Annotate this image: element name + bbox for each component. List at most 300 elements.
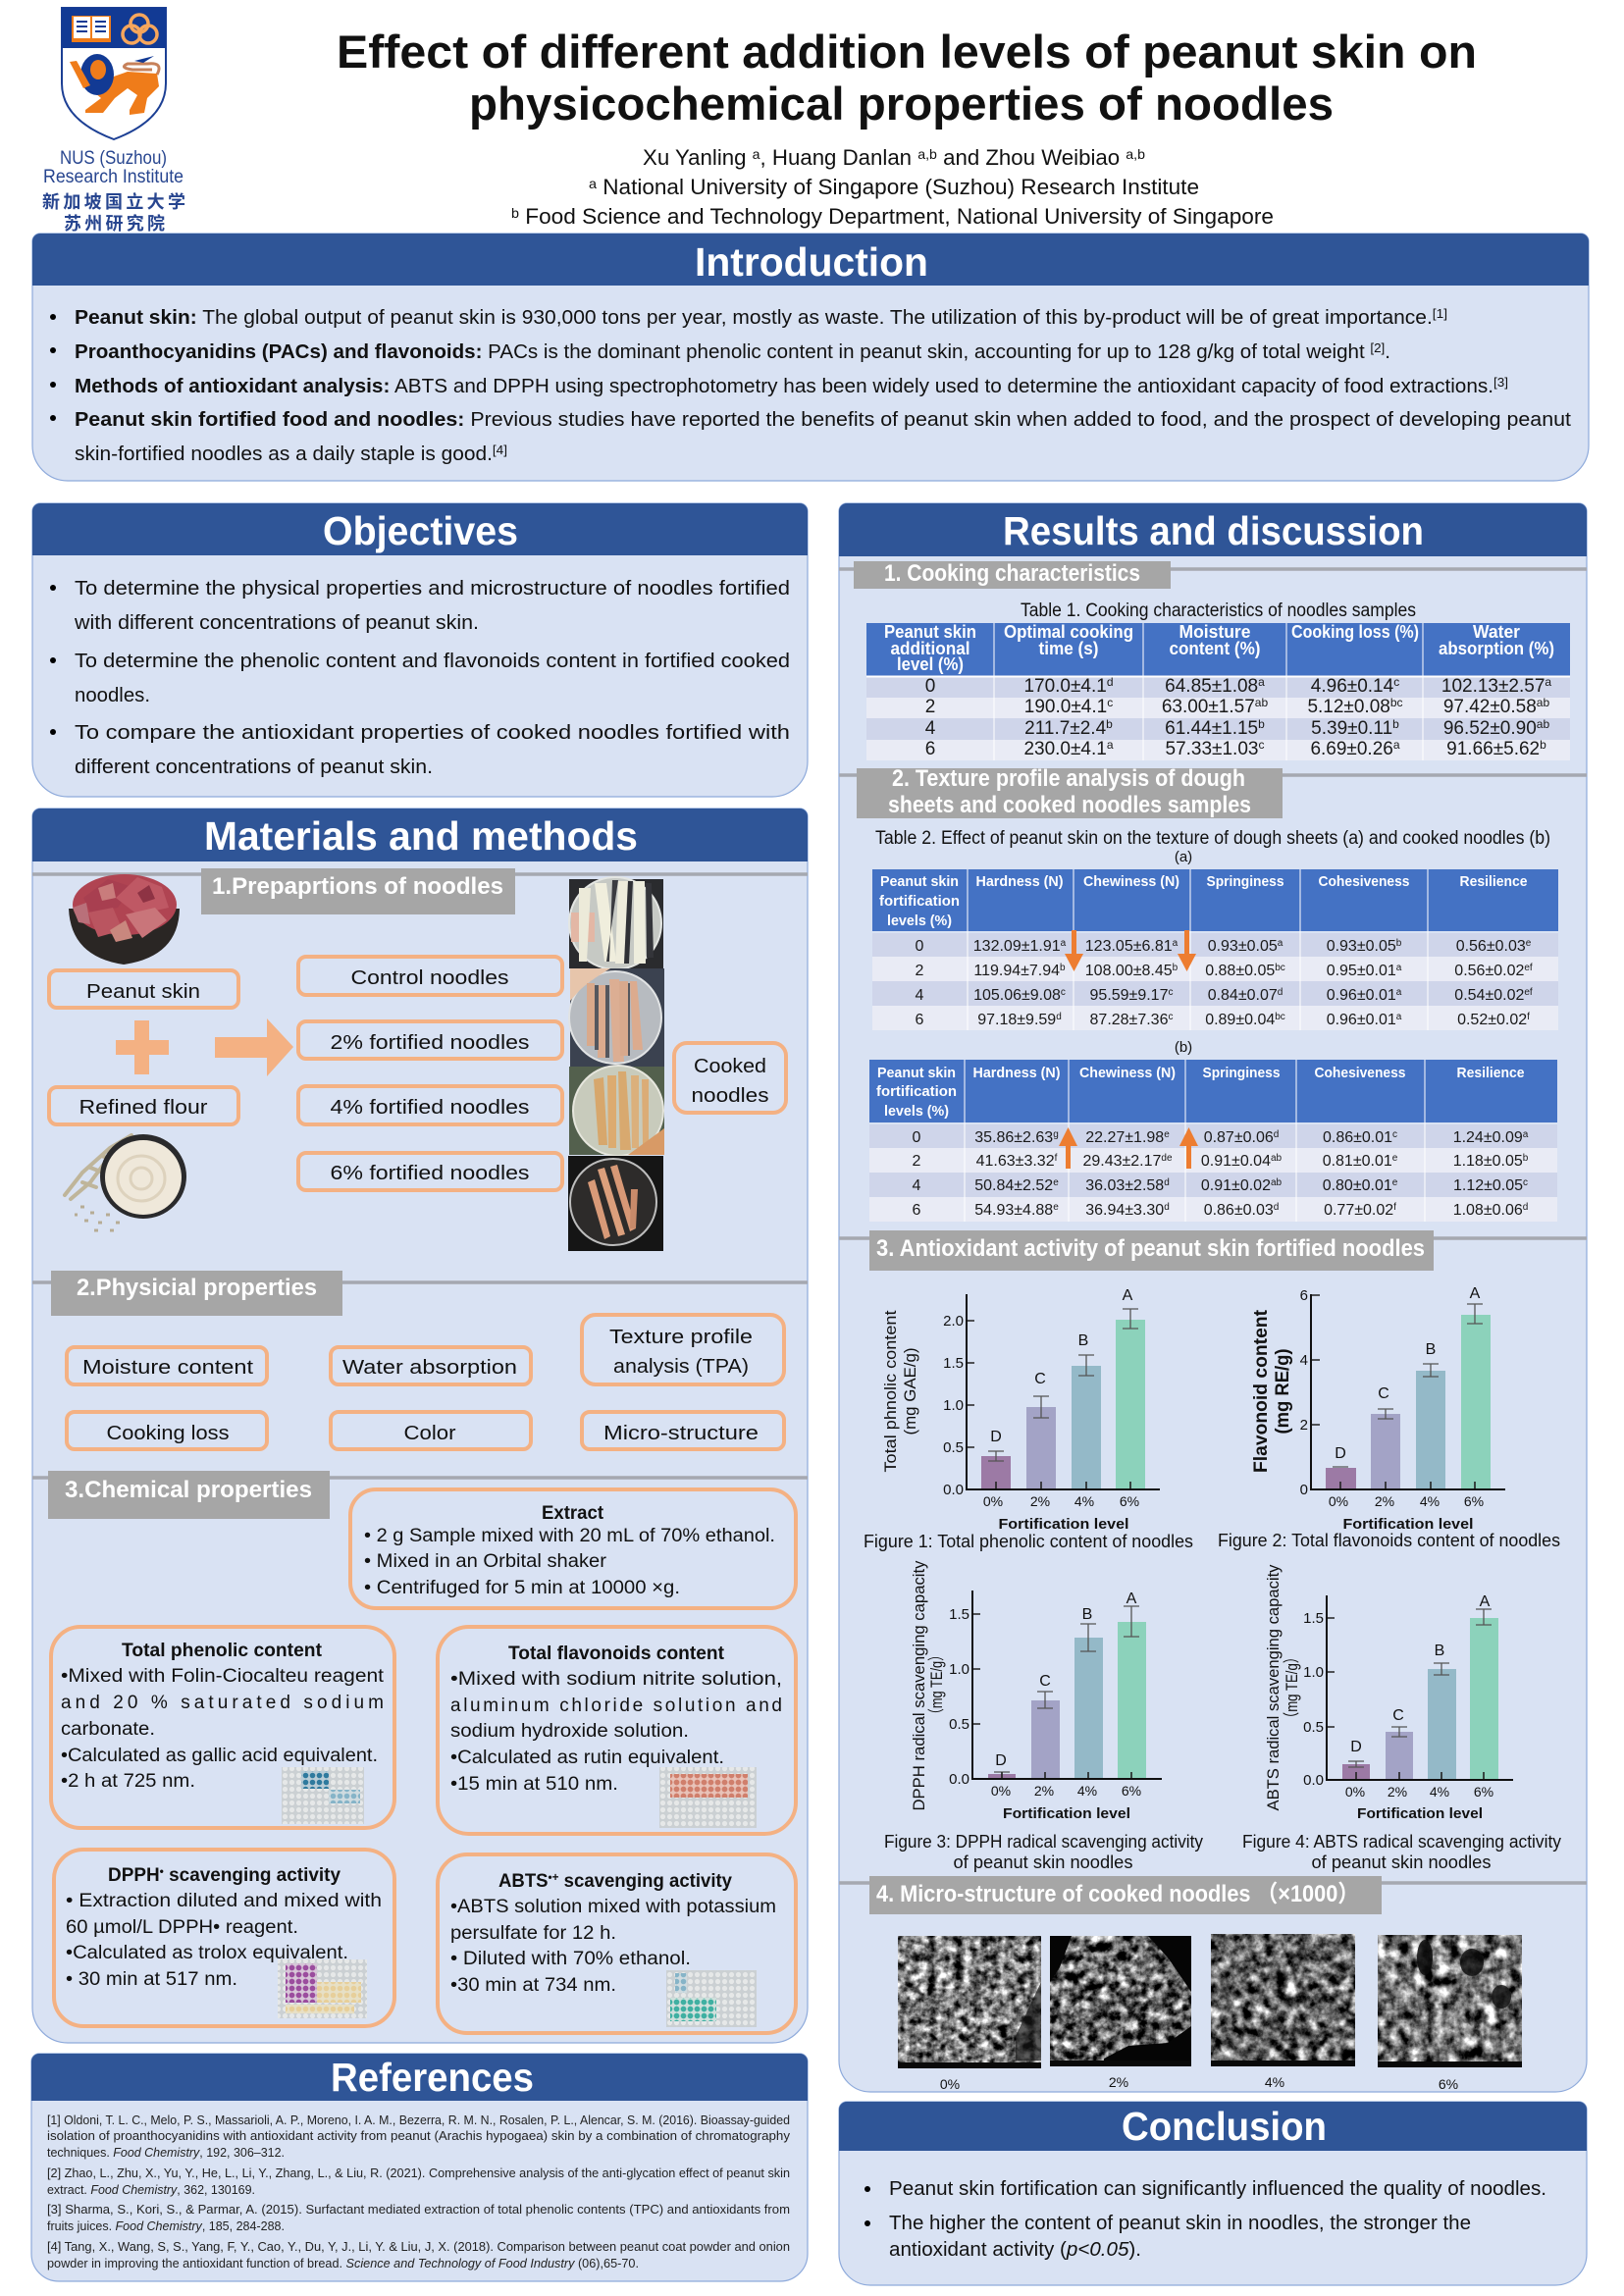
box: ABTS scavenging activity: ABTS	[498, 1871, 550, 1892]
table 2a: dough sheets: ef	[1524, 987, 1533, 998]
box: total phenolic content: carbonate.	[61, 1719, 155, 1740]
bar chart: total phenolic content: 2.0	[943, 1313, 964, 1330]
section label: micro-structure	[869, 1876, 1382, 1914]
table 2b label: (b)	[1175, 1039, 1192, 1056]
logo text	[42, 148, 185, 234]
heading: materials and methods: Materials and methods	[204, 813, 638, 859]
table 1: cooking characteristics: 2	[925, 697, 935, 717]
section label: cooking characteristics: 1. Cooking characteristics	[884, 560, 1140, 587]
table 2b: cooked noodles: d	[1164, 1177, 1170, 1188]
box: total phenolic content: Total phenolic content	[122, 1641, 323, 1661]
authors and affiliations: National University of Singapore (Suzhou) Research Institute	[597, 175, 1199, 199]
authors and affiliations: a,b	[917, 146, 937, 162]
table 1: cooking characteristics: 64.85±1.08	[1165, 676, 1258, 697]
image: SEM 6%	[1378, 1935, 1522, 2067]
bar chart: flavonoid content: 4	[1300, 1352, 1308, 1369]
box: total flavonoids content: Total flavonoids content	[508, 1644, 725, 1664]
table 2a: dough sheets: c	[1168, 987, 1173, 998]
panel: materials and methods	[32, 809, 808, 2043]
box: cooking loss: Cooking loss	[106, 1423, 230, 1444]
bar chart: flavonoid content: (mg RE/g)	[1273, 1348, 1293, 1435]
bar chart: total phenolic content: D	[990, 1429, 1002, 1445]
table 2a: dough sheets: b	[1396, 938, 1402, 949]
text block: reference list: isolation of proanthocyanidins with antioxidant activity from peanut (Arachis hypogaea) skin by a combination of chromatography	[47, 2128, 791, 2143]
section label: physical properties: 2.Physicial properties	[77, 1275, 317, 1301]
table 1: cooking characteristics: Water	[1473, 622, 1520, 642]
table 1: cooking characteristics: 91.66±5.62	[1446, 739, 1540, 759]
table 2a: dough sheets: 132.09±1.91	[973, 938, 1061, 955]
table 2b: cooked noodles: 1.24±0.09	[1453, 1129, 1523, 1146]
box: total phenolic content: •2 h at 725 nm.	[61, 1771, 195, 1792]
text block: introduction bullets: Peanut skin fortified food and noodles: Previous studies have reported the benefits of peanut skin when added to food, and the prospect of developing peanut	[75, 409, 1571, 431]
text block: introduction bullets: skin-fortified noodles as a daily staple is good.	[75, 444, 475, 465]
text block: objectives bullets: To compare the antioxidant properties of cooked noodles fortified with	[75, 722, 790, 744]
box: ABTS scavenging activity	[438, 1854, 796, 2033]
section label: texture profile analysis: sheets and cooked noodles samples	[888, 792, 1251, 818]
table 2b: cooked noodles: 1.18±0.05	[1453, 1153, 1523, 1170]
box: DPPH scavenging activity: • 30 min at 517 nm.	[66, 1969, 237, 1990]
table caption 2: Table 2. Effect of peanut skin on the texture of dough sheets (a) and cooked noodles (b)	[875, 828, 1550, 849]
bar chart: ABTS radical scavenging capacity: ABTS radical scavenging capacity	[1264, 1564, 1283, 1811]
photo: 2% noodles	[569, 968, 664, 1067]
icon: bowl of flour	[65, 1134, 186, 1230]
table 2a: dough sheets: 108.00±8.45	[1085, 963, 1173, 979]
box: total phenolic content: •Mixed with Folin-Ciocalteu reagent	[61, 1666, 385, 1687]
box: color	[331, 1412, 531, 1449]
table 2b: cooked noodles: 35.86±2.63	[974, 1129, 1053, 1146]
table 1: cooking characteristics: a	[1545, 675, 1551, 689]
heading: results and discussion: Results and discussion	[1003, 508, 1424, 553]
table 1: cooking characteristics: time (s)	[1038, 639, 1099, 658]
figure caption 2: Figure 2: Total flavonoids content of noodles	[1218, 1531, 1560, 1550]
table 1: cooking characteristics: 211.7±2.4	[1024, 718, 1106, 739]
table 2b: cooked noodles: c	[1392, 1129, 1397, 1140]
panel: introduction	[32, 234, 1589, 481]
box: total flavonoids content: •15 min at 510 nm.	[450, 1774, 618, 1795]
text block: objectives bullets	[50, 578, 790, 778]
text block: reference list: [2] Zhao, L., Zhu, X., Yu, Y., He, L., Li, Y., Zhang, L., & Liu, R. (2021). Comprehensive analysis of the anti-glycation effect of peanut skin	[47, 2166, 790, 2180]
title: physicochemical properties of noodles	[469, 78, 1334, 130]
text block: reference list: [3] Sharma, S., Kori, S., & Parmar, A. (2015). Surfactant mediated extraction of total phenolic contents (TPC) and antioxidants from	[47, 2202, 790, 2217]
text block: conclusion bullets: Peanut skin fortification can significantly influenced the quality of noodles.	[889, 2178, 1546, 2200]
image labels: 6%	[1439, 2076, 1458, 2092]
text block: conclusion bullets	[864, 2178, 1546, 2261]
table 2b: cooked noodles: ab	[1271, 1153, 1283, 1164]
table 1: cooking characteristics: 190.0±4.1	[1024, 697, 1107, 717]
table 1: cooking characteristics: level (%)	[897, 654, 964, 674]
table 2a: dough sheets: 0.88±0.05	[1205, 963, 1275, 979]
table 2b: cooked noodles: f	[1393, 1202, 1396, 1213]
bar chart: DPPH radical scavenging capacity: 1.5	[949, 1606, 969, 1623]
table 1: cooking characteristics: bc	[1390, 696, 1403, 709]
panel: conclusion	[839, 2102, 1587, 2285]
bar chart: ABTS radical scavenging capacity: 1.0	[1303, 1664, 1324, 1681]
table 1: cooking characteristics: 5.39±0.11	[1311, 718, 1392, 739]
table 1: cooking characteristics: 63.00±1.57	[1162, 697, 1255, 717]
box: DPPH scavenging activity: •Calculated as trolox equivalent.	[66, 1943, 348, 1963]
bar chart: flavonoid content: A	[1470, 1285, 1481, 1302]
icon: microplate teal	[666, 1970, 757, 2027]
box: 2% fortified noodles	[298, 1021, 562, 1059]
section label: texture profile analysis: 2. Texture profile analysis of dough	[892, 765, 1245, 792]
heading: conclusion: Conclusion	[1122, 2104, 1327, 2149]
table 2b: cooked noodles: 6	[913, 1202, 921, 1219]
bar chart: DPPH radical scavenging capacity: A	[1126, 1591, 1137, 1607]
table 2b: cooked noodles: a	[1523, 1129, 1529, 1140]
heading: introduction: Introduction	[695, 239, 928, 285]
authors and affiliations: and Zhou Weibiao	[937, 145, 1126, 170]
box: total flavonoids content: aluminum chloride solution and	[450, 1696, 782, 1716]
section label: texture profile analysis	[857, 765, 1283, 818]
text block: reference list: [4] Tang, X., Wang, S, S., Yang, F, Y., Cao, Y., Du, Y, J., Li, Y. & Liu, J, X. (2018). Comparison between peanut coat powder and onion	[47, 2239, 790, 2254]
bar chart: total phenolic content: A	[1123, 1287, 1133, 1304]
image labels: 4%	[1265, 2074, 1284, 2090]
bar chart: ABTS radical scavenging capacity	[1264, 1564, 1513, 1822]
table 2a: dough sheets: 0.52±0.02	[1457, 1012, 1527, 1028]
table 2b: cooked noodles: Springiness	[1203, 1065, 1280, 1081]
bar chart: total phenolic content: 4%	[1074, 1493, 1094, 1509]
bar chart: flavonoid content: 6%	[1464, 1493, 1484, 1509]
bar chart: total phenolic content: 6%	[1120, 1493, 1139, 1509]
bar chart: total phenolic content: 0.5	[943, 1439, 964, 1456]
heading: objectives: Objectives	[323, 508, 518, 553]
table 2b: cooked noodles: 0.86±0.03	[1204, 1202, 1274, 1219]
table 2a: dough sheets: 0.56±0.02	[1454, 963, 1524, 979]
table 2b: cooked noodles: 0.91±0.04	[1201, 1153, 1271, 1170]
bar chart: ABTS radical scavenging capacity: （mg TE/g）	[1283, 1650, 1301, 1725]
heading: references: References	[331, 2055, 534, 2100]
table 1: cooking characteristics: 6	[925, 739, 935, 759]
bar chart: DPPH radical scavenging capacity: 4%	[1077, 1783, 1097, 1799]
table 2a: dough sheets: a	[1396, 963, 1402, 973]
table 2a: dough sheets	[872, 869, 1558, 1030]
bar chart: total phenolic content: Total phnolic content	[881, 1310, 900, 1473]
bar chart: ABTS radical scavenging capacity: 2%	[1388, 1784, 1407, 1800]
section label: antioxidant activity	[869, 1230, 1434, 1271]
section label: chemical properties: 3.Chemical properties	[65, 1477, 312, 1503]
bar chart: total phenolic content	[881, 1287, 1160, 1533]
table 2a: dough sheets: d	[1056, 1012, 1062, 1022]
bar chart: total phenolic content: 1.5	[943, 1355, 964, 1372]
table 2a: dough sheets: 2	[916, 963, 924, 979]
icon: microplate blue	[282, 1767, 364, 1824]
table 2b: cooked noodles: 0.77±0.02	[1324, 1202, 1393, 1219]
table 1: cooking characteristics: 96.52±0.90	[1443, 718, 1537, 739]
table 1: cooking characteristics: 4	[925, 718, 936, 739]
table 2b: cooked noodles: e	[1392, 1153, 1398, 1164]
table 1: cooking characteristics: 102.13±2.57	[1441, 676, 1545, 697]
table 2b: cooked noodles: 0.87±0.06	[1204, 1129, 1274, 1146]
box: total flavonoids content: •Calculated as rutin equivalent.	[450, 1748, 724, 1768]
text block: introduction bullets: [4]	[493, 443, 507, 457]
table 1: cooking characteristics: 57.33±1.03	[1166, 739, 1258, 759]
arrow: chewiness increasing	[1179, 1127, 1198, 1169]
figure caption 1: Figure 1: Total phenolic content of noodles	[864, 1532, 1193, 1551]
text block: reference list: powder in improving the antioxidant function of bread. Science and Technology of Food Industry (06),65-70.	[47, 2256, 639, 2270]
table 2a: dough sheets: a	[1173, 938, 1179, 949]
table 1: cooking characteristics	[866, 622, 1570, 760]
bar chart: total phenolic content: Fortification level	[999, 1516, 1128, 1533]
table 2a: dough sheets: 0.93±0.05	[1327, 938, 1396, 955]
table 2b: cooked noodles: de	[1161, 1153, 1173, 1164]
table 2b: cooked noodles: 0	[913, 1129, 921, 1146]
text block: introduction bullets: Proanthocyanidins (PACs) and flavonoids: PACs is the dominant phenolic content in peanut skin, accounting for up to 128 g/kg of total weight	[75, 341, 1340, 363]
bar chart: total phenolic content: (mg GAE/g)	[901, 1348, 919, 1435]
box: micro-structure	[582, 1412, 784, 1449]
table 2a: dough sheets: 0.54±0.02	[1454, 987, 1524, 1004]
table 2b: cooked noodles: levels (%)	[884, 1103, 949, 1120]
table 1: cooking characteristics: c	[1107, 696, 1113, 709]
table 2a: dough sheets: 0.93±0.05	[1208, 938, 1278, 955]
photo: 6% noodles	[568, 1156, 663, 1251]
bar chart: ABTS radical scavenging capacity: A	[1480, 1593, 1491, 1610]
bar chart: DPPH radical scavenging capacity: （mg TE/g）	[927, 1648, 946, 1721]
bar chart: total phenolic content: 0.0	[943, 1482, 964, 1498]
box: total phenolic content	[51, 1627, 394, 1828]
table 2a: dough sheets: Resilience	[1460, 873, 1527, 890]
table 1: cooking characteristics: 6.69±0.26	[1310, 739, 1393, 759]
table 2a: dough sheets: 0.56±0.03	[1456, 938, 1526, 955]
table 2b: cooked noodles: d	[1164, 1202, 1170, 1213]
panel: objectives	[32, 503, 808, 797]
table caption 1: Table 1. Cooking characteristics of noodles samples	[1021, 600, 1416, 621]
text block: introduction bullets: Methods of antioxidant analysis: ABTS and DPPH using spectrophotometry has been widely used to determine the antioxidant capacity of food extractions.	[75, 376, 1454, 397]
table 2a: dough sheets: bc	[1275, 1012, 1285, 1022]
table 1: cooking characteristics: 0	[925, 676, 935, 697]
image: SEM 0%	[898, 1936, 1041, 2068]
table 2a: dough sheets: 119.94±7.94	[973, 963, 1060, 979]
table 1: cooking characteristics: b	[1258, 717, 1265, 731]
section label: micro-structure: 4. Micro-structure of cooked noodles （×1000）	[876, 1881, 1359, 1907]
table 2b: cooked noodles	[869, 1060, 1557, 1222]
box: 4% fortified noodles	[298, 1086, 562, 1124]
bar chart: flavonoid content: 0%	[1329, 1493, 1348, 1509]
box: DPPH scavenging activity: • Extraction diluted and mixed with	[66, 1891, 382, 1911]
section label: physical properties	[51, 1271, 342, 1316]
bar chart: ABTS radical scavenging capacity: 4%	[1430, 1784, 1449, 1800]
table 1: cooking characteristics: additional	[891, 639, 969, 658]
text block: reference list: extract. Food Chemistry, 362, 130169.	[47, 2182, 255, 2197]
bar chart: DPPH radical scavenging capacity: Fortification level	[1003, 1805, 1130, 1822]
table 2b: cooked noodles: 54.93±4.88	[974, 1202, 1053, 1219]
section label: chemical properties	[48, 1471, 330, 1519]
table 1: cooking characteristics: b	[1106, 717, 1113, 731]
table 1: cooking characteristics: 5.12±0.08	[1307, 697, 1390, 717]
table 1: cooking characteristics: ab	[1255, 696, 1268, 709]
table 2b: cooked noodles: f	[1055, 1153, 1058, 1164]
box: water absorption: Water absorption	[342, 1357, 517, 1379]
table 2b: cooked noodles: b	[1523, 1153, 1529, 1164]
box: 6% fortified noodles: 6% fortified noodles	[330, 1163, 530, 1184]
box: ABTS scavenging activity: scavenging activity	[559, 1871, 732, 1892]
table 2b: cooked noodles: 1.12±0.05	[1453, 1177, 1523, 1194]
bar chart: ABTS radical scavenging capacity: C	[1392, 1707, 1404, 1724]
authors and affiliations: a,b	[1126, 146, 1145, 162]
table 2b: cooked noodles: fortification	[876, 1083, 957, 1100]
authors and affiliations	[511, 145, 1274, 229]
table 2a: dough sheets: 0	[916, 938, 924, 955]
box: ABTS scavenging activity: •ABTS solution mixed with potassium	[450, 1897, 776, 1917]
bar chart: DPPH radical scavenging capacity: C	[1039, 1673, 1051, 1690]
table 2a: dough sheets: e	[1526, 938, 1532, 949]
table 1: cooking characteristics: ab	[1537, 717, 1549, 731]
icon: microplate purple	[278, 1959, 367, 2018]
table 2b: cooked noodles: d	[1274, 1129, 1279, 1140]
box: texture profile analysis: analysis (TPA)	[613, 1356, 749, 1378]
table 2b: cooked noodles: 0.86±0.01	[1323, 1129, 1392, 1146]
table 1: cooking characteristics: content (%)	[1170, 639, 1260, 658]
table 1: cooking characteristics: Cooking loss (%)	[1291, 622, 1419, 642]
table 2b: cooked noodles: 36.03±2.58	[1085, 1177, 1164, 1194]
bar chart: DPPH radical scavenging capacity: 0.0	[949, 1771, 969, 1788]
icon: plus	[116, 1020, 169, 1074]
table 1: cooking characteristics: absorption (%)	[1439, 639, 1554, 658]
figure caption 3: Figure 3: DPPH radical scavenging activity	[884, 1832, 1203, 1852]
bar chart: ABTS radical scavenging capacity: 0.5	[1303, 1719, 1324, 1736]
table 2a: dough sheets: d	[1278, 987, 1283, 998]
bar chart: flavonoid content: 0	[1300, 1482, 1308, 1498]
title	[337, 26, 1477, 130]
text block: introduction bullets: [3]	[1493, 375, 1508, 390]
box: peanut skin: Peanut skin	[86, 981, 200, 1003]
icon: shield crest	[62, 8, 166, 139]
table 2b: cooked noodles: e	[1053, 1177, 1059, 1188]
table 2a: dough sheets: 0.95±0.01	[1327, 963, 1396, 979]
text block: introduction bullets	[50, 306, 1571, 465]
box: refined flour: Refined flour	[79, 1097, 208, 1119]
table 2a: dough sheets: Peanut skin	[880, 873, 959, 890]
bar chart: total phenolic content: C	[1034, 1371, 1046, 1387]
box: ABTS scavenging activity: •+	[549, 1870, 559, 1884]
arrow: ingredients to noodles	[215, 1018, 293, 1076]
text block: objectives bullets: noodles.	[75, 685, 150, 706]
figure caption 4	[1242, 1832, 1561, 1872]
bar chart: ABTS radical scavenging capacity: 0%	[1345, 1784, 1365, 1800]
table 2a: dough sheets: 95.59±9.17	[1090, 987, 1168, 1004]
logo text: Research Institute	[43, 167, 183, 187]
table 1: cooking characteristics: 61.44±1.15	[1165, 718, 1258, 739]
table 2a: dough sheets: ef	[1524, 963, 1533, 973]
box: DPPH scavenging activity: scavenging activity	[164, 1865, 341, 1886]
bar chart: DPPH radical scavenging capacity: D	[995, 1752, 1007, 1769]
figure caption 3	[884, 1832, 1203, 1872]
table 1: cooking characteristics: b	[1540, 738, 1546, 752]
table 1: cooking characteristics: Peanut skin	[884, 622, 976, 642]
image: SEM 2%	[1050, 1936, 1191, 2066]
photo: control noodles	[569, 877, 663, 969]
text block: introduction bullets: [1]	[1433, 306, 1447, 321]
table 2b: cooked noodles: 0.80±0.01	[1323, 1177, 1392, 1194]
text block: objectives bullets: To determine the phenolic content and flavonoids content in fortified cooked	[75, 651, 790, 672]
table 1: cooking characteristics: 4.96±0.14	[1311, 676, 1393, 697]
table 2a: dough sheets: fortification	[879, 893, 960, 910]
table 2a: dough sheets: Hardness (N)	[975, 873, 1064, 890]
bar chart: ABTS radical scavenging capacity: 1.5	[1303, 1610, 1324, 1627]
table 1: cooking characteristics: c	[1393, 675, 1399, 689]
table 2a: dough sheets: c	[1168, 1012, 1173, 1022]
figure caption 4: of peanut skin noodles	[1311, 1852, 1492, 1872]
bar chart: total phenolic content: 0%	[983, 1493, 1003, 1509]
table 2a: dough sheets: Chewiness (N)	[1083, 873, 1179, 890]
figure caption 4: Figure 4: ABTS radical scavenging activity	[1242, 1832, 1561, 1852]
text block: reference list: techniques. Food Chemistry, 192, 306–312.	[47, 2145, 285, 2160]
table 2a: dough sheets: 0.96±0.01	[1327, 987, 1396, 1004]
box: total flavonoids content: •Mixed with sodium nitrite solution,	[450, 1669, 782, 1690]
bar chart: ABTS radical scavenging capacity: Fortification level	[1357, 1805, 1483, 1822]
box: 4% fortified noodles: 4% fortified noodles	[330, 1097, 530, 1119]
table 2a: dough sheets: 97.18±9.59	[977, 1012, 1056, 1028]
table 2a: dough sheets: levels (%)	[887, 913, 952, 929]
box: DPPH scavenging activity: DPPH	[108, 1865, 160, 1886]
text block: introduction bullets: [2]	[1370, 340, 1385, 355]
bar chart: flavonoid content: 6	[1300, 1287, 1308, 1304]
table 1: cooking characteristics: d	[1107, 675, 1114, 689]
bar chart: DPPH radical scavenging capacity: 0%	[991, 1783, 1011, 1799]
box: total phenolic content: •Calculated as gallic acid equivalent.	[61, 1746, 378, 1766]
bar chart: flavonoid content: C	[1378, 1385, 1389, 1402]
box: extract: • Centrifuged for 5 min at 10000 ×g.	[364, 1578, 680, 1598]
box: DPPH scavenging activity	[54, 1850, 394, 2026]
figure caption 3: of peanut skin noodles	[954, 1852, 1132, 1872]
section label: antioxidant activity: 3. Antioxidant activity of peanut skin fortified noodles	[876, 1235, 1425, 1262]
table 2b: cooked noodles: e	[1392, 1177, 1398, 1188]
box: control noodles	[298, 957, 562, 995]
bar chart: ABTS radical scavenging capacity: 6%	[1474, 1784, 1493, 1800]
bar chart: DPPH radical scavenging capacity	[910, 1560, 1162, 1822]
bar chart: ABTS radical scavenging capacity: B	[1435, 1643, 1444, 1659]
table 2b: cooked noodles: e	[1164, 1129, 1170, 1140]
box: total flavonoids content	[438, 1627, 796, 1834]
text block: conclusion bullets: antioxidant activity ( p<0.05).	[889, 2239, 1141, 2261]
table 1: cooking characteristics: ab	[1537, 696, 1549, 709]
bar chart: DPPH radical scavenging capacity: 6%	[1122, 1783, 1141, 1799]
table 2b: cooked noodles: 0.91±0.02	[1201, 1177, 1271, 1194]
table 1: cooking characteristics: Moisture	[1179, 622, 1250, 642]
table 2a: dough sheets: a	[1396, 1012, 1402, 1022]
box: 6% fortified noodles	[298, 1153, 562, 1190]
bar chart: DPPH radical scavenging capacity: 2%	[1034, 1783, 1054, 1799]
authors and affiliations: a	[589, 176, 597, 191]
table 2b: cooked noodles: 0.81±0.01	[1323, 1153, 1392, 1170]
table 2b: cooked noodles: 22.27±1.98	[1085, 1129, 1164, 1146]
table 2b: cooked noodles: d	[1274, 1202, 1279, 1213]
table 2b: cooked noodles: Resilience	[1456, 1065, 1525, 1081]
table 1: cooking characteristics: a	[1393, 738, 1400, 752]
box: extract: • 2 g Sample mixed with 20 mL of 70% ethanol.	[364, 1526, 775, 1546]
logo text: NUS (Suzhou)	[60, 148, 167, 169]
table 2b: cooked noodles: Peanut skin	[877, 1065, 956, 1081]
box: cooking loss	[67, 1412, 267, 1449]
section label: preparations of noodles	[201, 868, 515, 914]
table 2b: cooked noodles: 50.84±2.52	[974, 1177, 1053, 1194]
table 1: cooking characteristics: c	[1258, 738, 1264, 752]
table 2b: cooked noodles: 29.43±2.17	[1082, 1153, 1161, 1170]
box: peanut skin	[49, 970, 238, 1008]
bar chart: DPPH radical scavenging capacity: 1.0	[949, 1661, 969, 1678]
image: SEM 4%	[1211, 1934, 1355, 2066]
box: DPPH scavenging activity: 60 µmol/L DPPH• reagent.	[66, 1917, 298, 1938]
text block: introduction bullets: .	[1385, 341, 1390, 363]
arrow: hardness decreasing	[1065, 930, 1083, 971]
box: cooked noodles: Cooked	[694, 1056, 766, 1077]
box: micro-structure: Micro-structure	[603, 1423, 759, 1444]
box: 2% fortified noodles: 2% fortified noodles	[330, 1032, 530, 1054]
table 2a: dough sheets: c	[1061, 987, 1066, 998]
table 2b: cooked noodles: Chewiness (N)	[1079, 1065, 1176, 1081]
box: moisture content: Moisture content	[82, 1357, 254, 1379]
table 2a: dough sheets: bc	[1275, 963, 1285, 973]
box: cooked noodles	[674, 1043, 786, 1113]
